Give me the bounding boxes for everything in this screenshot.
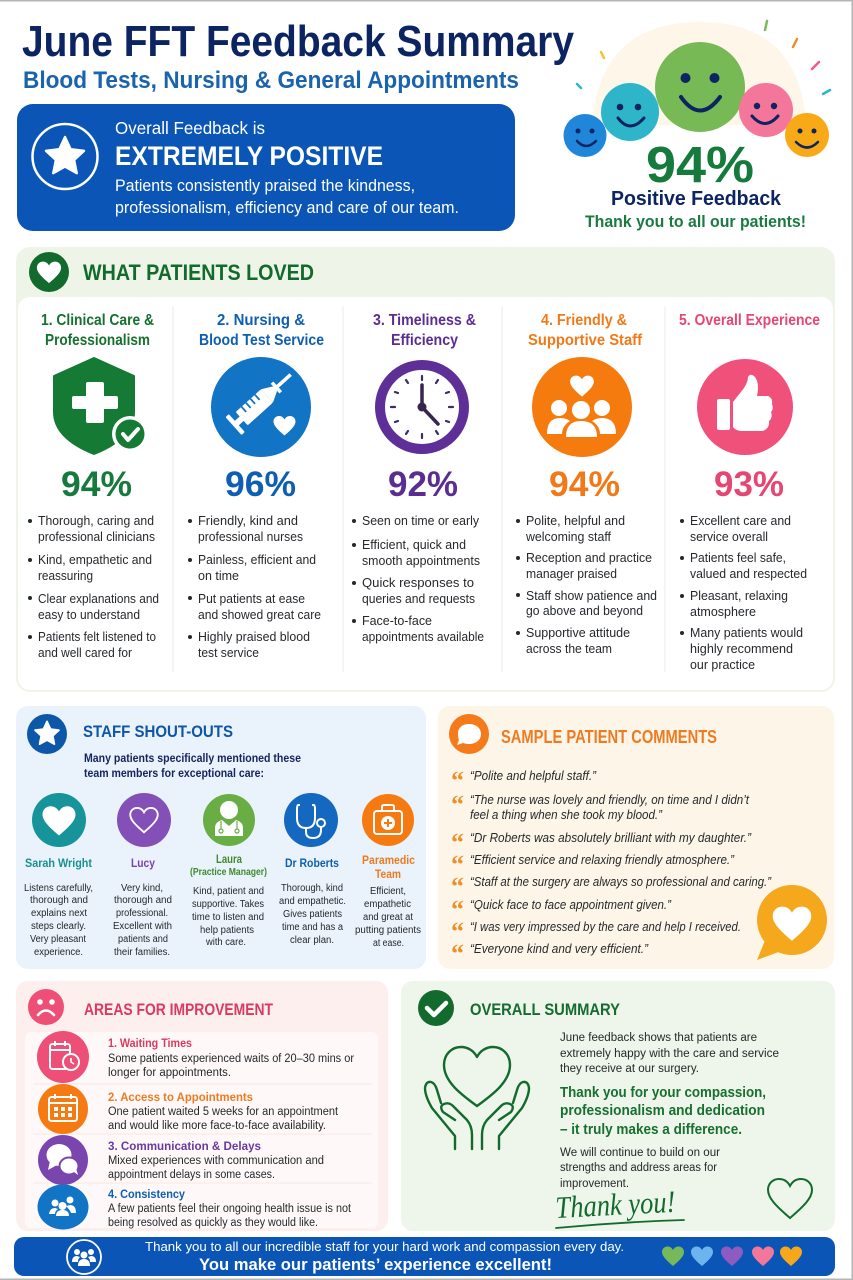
bullet list: Many patients would	[690, 625, 803, 640]
icon: row of hearts	[662, 1246, 802, 1266]
icon: team in circle	[67, 1240, 101, 1274]
comment list: “Efficient service and relaxing friendly atmosphere.”	[470, 853, 735, 867]
headline statistic: 94% positive feedback	[585, 136, 806, 231]
bullet list: and showed great care	[198, 607, 321, 622]
staff: Dr Roberts: and empathetic.	[279, 896, 346, 907]
bullet list: on time	[198, 568, 239, 583]
panel: staff shout-outs	[16, 706, 426, 969]
bullet list: Supportive attitude	[526, 625, 630, 640]
staff: Lucy: Very kind,	[121, 883, 163, 894]
icon: shield with cross	[54, 358, 148, 454]
comment list: “	[451, 895, 464, 924]
intro text: Many patients specifically mentioned these	[84, 751, 301, 765]
staff: Paramedic Team	[355, 794, 421, 949]
panel: overall summary	[401, 981, 835, 1231]
panel: overall feedback banner	[17, 104, 515, 231]
thank-you statement: Thank you for your compassion,	[560, 1085, 766, 1101]
bullet list: Put patients at ease	[198, 591, 305, 606]
comment list: “	[451, 939, 464, 968]
column: nursing and blood test service	[188, 312, 324, 660]
staff: Sarah Wright	[24, 793, 93, 958]
summary text: they receive at our surgery.	[560, 1063, 699, 1075]
staff: Paramedic Team: Team	[375, 867, 401, 881]
staff: Paramedic Team: putting patients	[355, 925, 421, 936]
bullet list: Highly praised blood	[198, 629, 310, 644]
item: communication and delays: appointment delays in some cases.	[108, 1169, 275, 1181]
bullet list: Efficient, quick and	[362, 537, 466, 552]
percentage: 94%	[549, 465, 620, 504]
item: access to appointments: and would like more face-to-face availability.	[108, 1120, 326, 1132]
icon: star badge	[27, 714, 67, 754]
icon: heart speech bubble	[757, 885, 827, 960]
bullet list: atmosphere	[690, 604, 756, 619]
bullet list: reassuring	[38, 568, 93, 583]
staff: Paramedic Team: empathetic	[364, 899, 411, 910]
column heading: Professionalism	[45, 332, 150, 349]
panel: sample patient comments	[438, 706, 834, 969]
percentage: 94%	[61, 465, 132, 504]
thank-you statement: – it truly makes a difference.	[560, 1122, 742, 1138]
staff: Dr Roberts: Gives patients	[283, 909, 342, 920]
bullet list: highly recommend	[690, 641, 793, 656]
staff: Sarah Wright: thorough and	[30, 895, 88, 906]
bullet list: Patients felt listened to	[38, 629, 156, 644]
icon: check badge	[418, 990, 454, 1026]
summary text: extremely happy with the care and service	[560, 1048, 779, 1060]
bullet list: professional clinicians	[38, 529, 155, 544]
bullet list: Friendly, kind and	[198, 513, 298, 528]
icon: team with heart	[532, 357, 632, 457]
column heading: 1. Clinical Care &	[41, 312, 154, 329]
staff: Lucy	[113, 793, 172, 958]
column heading: 5. Overall Experience	[679, 312, 820, 329]
heading: SAMPLE PATIENT COMMENTS	[501, 727, 717, 747]
item: communication and delays: Mixed experiences with communication and	[108, 1155, 324, 1167]
bullet list: Polite, helpful and	[526, 513, 625, 528]
thank-you statement: professionalism and dedication	[560, 1103, 765, 1119]
icon: speech bubble	[449, 714, 489, 754]
comment list: “	[451, 850, 464, 879]
intro text	[84, 751, 301, 780]
comment list: “The nurse was lovely and friendly, on time and I didn’t	[470, 793, 749, 807]
staff: Paramedic Team: and great at	[363, 912, 413, 923]
comment list	[451, 766, 772, 968]
staff: Paramedic Team: at ease.	[373, 938, 404, 949]
item: waiting times: longer for appointments.	[108, 1067, 231, 1079]
bullet list	[352, 513, 484, 644]
footer text	[145, 1239, 624, 1274]
subtitle: Blood Tests, Nursing & General Appointments	[23, 67, 519, 94]
comment list: “Staff at the surgery are always so professional and caring.”	[470, 875, 772, 889]
column: clinical care	[28, 312, 159, 660]
staff: Laura: time to listen and	[192, 912, 264, 923]
bullet list: Seen on time or early	[362, 513, 479, 528]
staff: Sarah Wright: Sarah Wright	[25, 856, 92, 870]
footer text: You make our patients’ experience excellent!	[199, 1255, 552, 1274]
column heading: 2. Nursing &	[217, 312, 305, 329]
banner text: Overall Feedback is	[115, 118, 265, 138]
column heading: Blood Test Service	[199, 332, 324, 349]
column heading: Efficiency	[391, 332, 458, 349]
column: timeliness and efficiency	[352, 312, 484, 644]
headline statistic: 94% positive feedback: Positive Feedback	[611, 187, 782, 210]
banner text: EXTREMELY POSITIVE	[115, 141, 383, 171]
staff: Sarah Wright: explains next	[31, 908, 87, 919]
bullet list: queries and requests	[362, 591, 475, 606]
title: June FFT Feedback Summary	[22, 17, 574, 66]
panel: what patients loved	[16, 247, 835, 692]
closing text: We will continue to build on our	[560, 1147, 720, 1159]
staff: Sarah Wright: Very pleasant	[30, 934, 86, 945]
staff: Paramedic Team: Efficient,	[370, 886, 406, 897]
item: waiting times	[37, 1031, 354, 1083]
comment list: “	[451, 828, 464, 857]
staff: Dr Roberts: time and has a	[282, 922, 343, 933]
bullet list: service overall	[690, 529, 768, 544]
staff: Lucy: Lucy	[131, 856, 155, 870]
closing text	[560, 1147, 720, 1190]
staff: Laura: Kind, patient and	[193, 886, 264, 897]
staff: Dr Roberts	[279, 793, 346, 946]
bullet list: valued and respected	[690, 566, 807, 581]
column heading	[41, 312, 154, 349]
bullet list: and well cared for	[38, 645, 133, 660]
intro text: team members for exceptional care:	[84, 766, 264, 780]
bullet list: Pleasant, relaxing	[690, 588, 788, 603]
staff: Laura: Laura	[216, 852, 242, 866]
footer text: Thank you to all our incredible staff for your hard work and compassion every day.	[145, 1239, 624, 1254]
bullet list: test service	[198, 645, 259, 660]
item: communication and delays	[38, 1135, 324, 1185]
icon: hands holding heart	[425, 1047, 529, 1149]
column heading: Supportive Staff	[528, 332, 643, 349]
staff: Lucy: their families.	[114, 947, 170, 958]
icon: clock	[380, 365, 464, 449]
column heading: 3. Timeliness &	[373, 312, 476, 329]
footer banner	[14, 1237, 835, 1276]
bullet list: Kind, empathetic and	[38, 552, 152, 567]
column heading	[373, 312, 476, 349]
bullet list: Staff show patience and	[526, 588, 657, 603]
illustration: smiley faces	[564, 21, 830, 157]
percentage: 96%	[225, 465, 296, 504]
bullet list	[680, 513, 807, 672]
column: overall experience	[679, 312, 820, 672]
headline statistic: 94% positive feedback: 94%	[646, 136, 754, 193]
staff: Laura	[190, 794, 267, 948]
item: access to appointments: 2. Access to Appointments	[108, 1092, 253, 1104]
bullet list	[188, 513, 321, 660]
staff: Lucy: professional.	[116, 908, 168, 919]
comment list: “Everyone kind and very efficient.”	[470, 942, 649, 956]
bullet list: our practice	[690, 657, 755, 672]
bullet list: professional nurses	[198, 529, 303, 544]
comment list: “	[451, 872, 464, 901]
bullet list	[28, 513, 159, 660]
bullet list	[516, 513, 657, 656]
bullet list: easy to understand	[38, 607, 140, 622]
bullet list: Excellent care and	[690, 513, 791, 528]
bullet list: Patients feel safe,	[690, 550, 786, 565]
icon: thumbs up	[697, 359, 793, 455]
heading: AREAS FOR IMPROVEMENT	[84, 1000, 273, 1019]
comment list: “Dr Roberts was absolutely brilliant with my daughter.”	[470, 831, 752, 845]
banner text: Patients consistently praised the kindness,	[115, 177, 415, 195]
staff: Sarah Wright: Listens carefully,	[24, 883, 93, 894]
column heading	[199, 312, 324, 349]
bullet list: Thorough, caring and	[38, 513, 154, 528]
comment list: “I was very impressed by the care and help I received.	[470, 920, 741, 934]
staff: Laura: (Practice Manager)	[190, 867, 267, 878]
staff: Dr Roberts: clear plan.	[290, 935, 334, 946]
item: waiting times: Some patients experienced waits of 20–30 mins or	[108, 1053, 354, 1065]
bullet list: Painless, efficient and	[198, 552, 316, 567]
percentage: 93%	[714, 465, 784, 504]
staff: Sarah Wright: steps clearly.	[31, 921, 86, 932]
panel: areas for improvement	[16, 981, 388, 1231]
bullet list: smooth appointments	[362, 553, 480, 568]
item: consistency: A few patients feel their ongoing health issue is not	[108, 1203, 352, 1215]
staff: Lucy: Excellent with	[113, 921, 172, 932]
item: access to appointments	[38, 1084, 339, 1134]
staff: Lucy: patients and	[118, 934, 168, 945]
staff: Laura: with care.	[205, 937, 246, 948]
bullet list: Clear explanations and	[38, 591, 159, 606]
heading: WHAT PATIENTS LOVED	[83, 260, 314, 285]
signature: thank you: Thank you!	[555, 1184, 676, 1225]
banner text: professionalism, efficiency and care of our team.	[115, 199, 459, 217]
bullet list: Face-to-face	[362, 613, 432, 628]
comment list: “Quick face to face appointment given.”	[470, 898, 672, 912]
item: consistency	[38, 1184, 352, 1230]
bullet list: Quick responses to	[362, 575, 474, 590]
comment list: feel a thing when she took my blood.”	[470, 808, 663, 822]
closing text: improvement.	[560, 1178, 629, 1190]
thank-you statement	[560, 1085, 766, 1138]
summary text: June feedback shows that patients are	[560, 1032, 757, 1044]
bullet list: go above and beyond	[526, 603, 643, 618]
staff: Paramedic Team: Paramedic	[362, 853, 415, 867]
column heading: 4. Friendly &	[541, 312, 627, 329]
comment list: “Polite and helpful staff.”	[470, 769, 597, 783]
item: communication and delays: 3. Communication & Delays	[108, 1141, 261, 1153]
item: consistency: being resolved as quickly as they would like.	[108, 1217, 318, 1229]
bullet list: welcoming staff	[525, 529, 611, 544]
heading: OVERALL SUMMARY	[470, 1000, 621, 1019]
comment list: “	[451, 790, 464, 819]
staff: Dr Roberts: Thorough, kind	[281, 883, 343, 894]
icon: heart badge	[29, 252, 69, 292]
comment list: “	[451, 917, 464, 946]
bullet list: across the team	[526, 641, 612, 656]
staff: Dr Roberts: Dr Roberts	[285, 856, 339, 870]
banner text	[115, 118, 459, 217]
bullet list: Reception and practice	[526, 550, 652, 565]
column: friendly and supportive staff	[516, 312, 657, 656]
bullet list: appointments available	[362, 629, 484, 644]
icon: syringe and heart	[211, 357, 311, 457]
summary text	[560, 1032, 779, 1075]
comment list: “	[451, 766, 464, 795]
icon: heart outline	[768, 1179, 812, 1218]
closing text: strengths and address areas for	[560, 1162, 717, 1174]
staff: Sarah Wright: experience.	[34, 947, 83, 958]
percentage: 92%	[388, 465, 458, 504]
item: waiting times: 1. Waiting Times	[108, 1038, 192, 1050]
staff: Laura: help patients	[200, 925, 254, 936]
column heading	[528, 312, 643, 349]
staff: Laura: supportive. Takes	[192, 899, 264, 910]
item: consistency: 4. Consistency	[108, 1189, 186, 1201]
staff: Lucy: thorough and	[114, 895, 172, 906]
bullet list: manager praised	[526, 566, 617, 581]
heading: STAFF SHOUT-OUTS	[83, 722, 233, 741]
item: access to appointments: One patient waited 5 weeks for an appointment	[108, 1106, 339, 1118]
icon: sad face	[28, 989, 64, 1025]
icon: star in circle	[32, 124, 98, 189]
headline statistic: 94% positive feedback: Thank you to all our patients!	[585, 212, 806, 231]
